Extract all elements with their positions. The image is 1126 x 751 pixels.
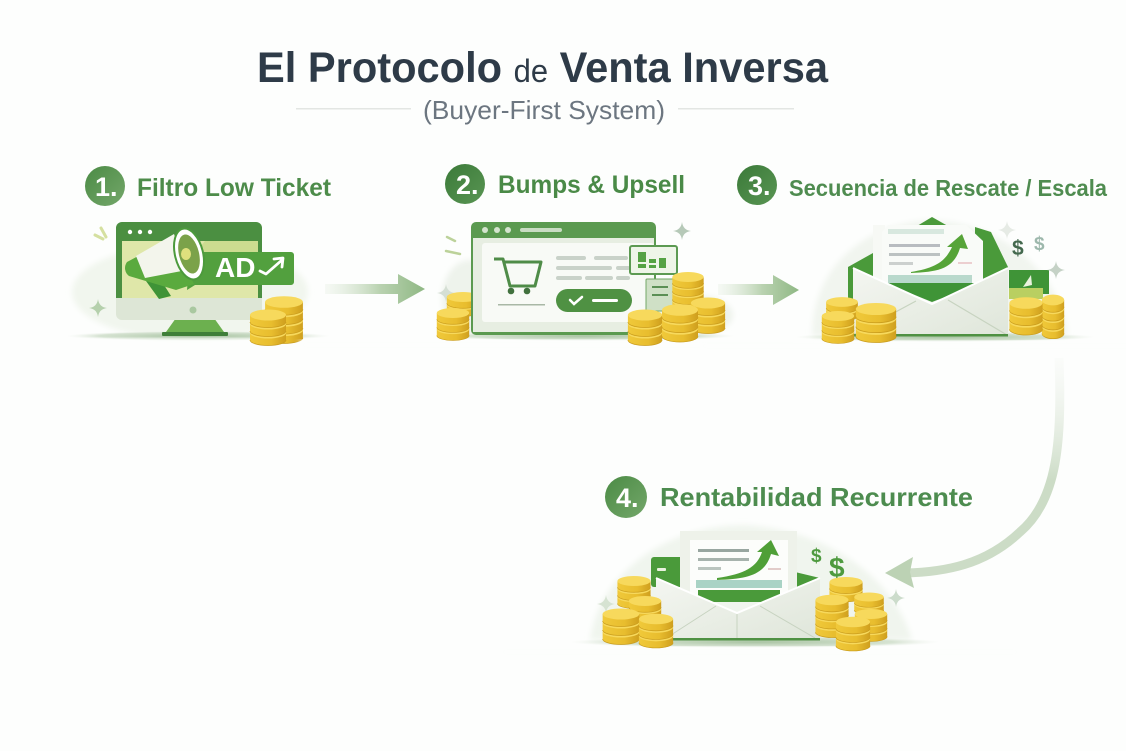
report paper <box>680 531 797 602</box>
step 1 heading: Filtro Low Ticket <box>137 174 332 202</box>
step 2 heading <box>445 164 685 204</box>
coins <box>822 295 1064 343</box>
step 3 heading <box>737 165 1107 205</box>
illustration: envelope with report: $ <box>1034 234 1045 255</box>
report paper <box>882 225 983 291</box>
illustration: envelope with coins: $ <box>829 552 845 583</box>
AD banner: AD <box>215 252 255 283</box>
step 3 heading: Secuencia de Rescate / Escala <box>789 175 1107 201</box>
arrow 2 to 3 <box>718 275 799 305</box>
coins <box>628 272 725 346</box>
envelope front <box>853 268 1008 336</box>
title: El Protocolo de Venta Inversa <box>257 44 829 92</box>
text lines <box>556 256 630 280</box>
AD banner <box>187 252 294 290</box>
illustration: envelope with report <box>700 217 1126 351</box>
coins <box>250 296 303 346</box>
step 4 heading: 4. <box>616 483 639 513</box>
subtitle: (Buyer-First System) <box>423 95 665 125</box>
step 4: Rentabilidad Recurrente <box>500 476 1020 657</box>
step 2 heading: 2. <box>456 170 479 200</box>
button <box>556 289 632 312</box>
step 1: Filtro Low Ticket <box>0 166 400 351</box>
curved arrow 3 to 4 <box>885 358 1060 588</box>
document card <box>646 279 674 311</box>
step 2 heading: Bumps & Upsell <box>498 171 685 199</box>
envelope front <box>656 578 820 640</box>
dollar signs: $ <box>811 546 822 567</box>
icon: megaphone <box>125 225 209 299</box>
step 4 heading: Rentabilidad Recurrente <box>660 482 973 512</box>
arrow 1 to 2 <box>325 274 425 304</box>
step 3 heading: 3. <box>748 171 771 201</box>
illustration: envelope with coins <box>500 525 1020 657</box>
dollar signs: $ <box>1012 237 1024 260</box>
chart card <box>630 246 677 274</box>
step 1 heading <box>85 166 332 206</box>
step 4 heading <box>605 476 973 518</box>
step 2: Bumps & Upsell <box>300 164 800 350</box>
coins <box>603 576 887 651</box>
illustration: checkout window <box>300 222 800 350</box>
step 1 heading: 1. <box>95 172 118 202</box>
illustration: monitor with megaphone ad <box>0 222 400 351</box>
step 3: Secuencia de Rescate / Escala <box>700 165 1126 351</box>
icon: shopping cart <box>494 259 545 306</box>
